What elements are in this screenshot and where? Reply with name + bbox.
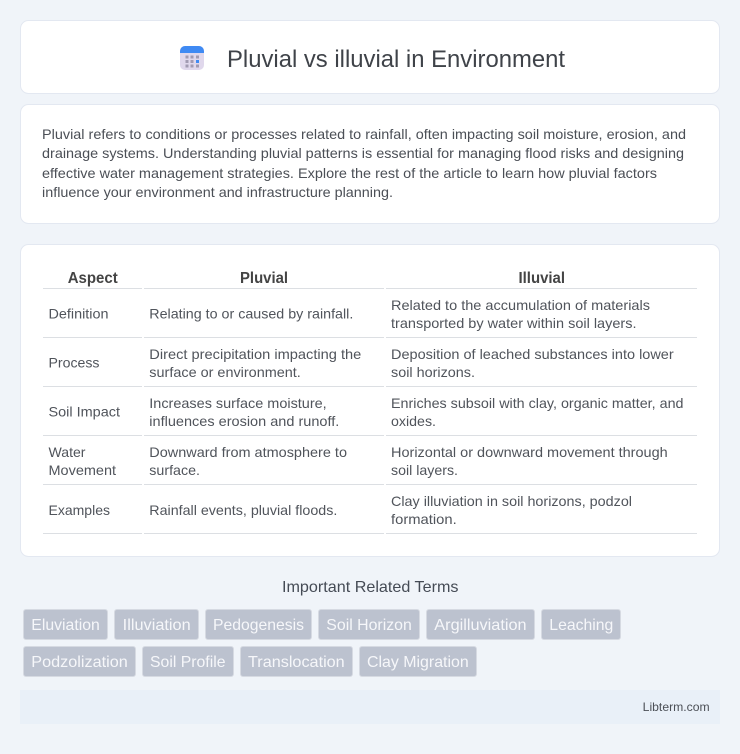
chip: Clay Migration: Clay Migration — [367, 654, 469, 671]
row: process: Direct precipitation impacting the — [149, 346, 362, 362]
row: examples: Examples — [48, 502, 110, 518]
chip: Soil Horizon: Soil Horizon — [326, 617, 412, 634]
chip: Pedogenesis — [206, 610, 312, 640]
text block: introduction: Pluvial refers to conditions or processes related to rainfall, often impacting soil moisture, erosion, and — [42, 126, 686, 142]
table header: Illuvial — [518, 270, 565, 287]
chip: Leaching — [542, 610, 620, 640]
row: water movement: Water — [48, 444, 86, 460]
chip: Podzolization — [24, 646, 136, 676]
chip: Clay Migration — [360, 646, 476, 676]
row: soil impact — [48, 395, 684, 429]
row: soil impact: Enriches subsoil with clay, organic matter, and — [391, 395, 684, 411]
text block: introduction: drainage systems. Understanding pluvial patterns is essential for managing flood risks and designing — [42, 145, 684, 161]
panel: related term chips — [24, 610, 620, 676]
panel: title card — [20, 20, 720, 94]
row: soil impact: oxides. — [391, 413, 436, 429]
title: Pluvial vs illuvial in Environment — [227, 46, 565, 73]
panel: comparison table — [20, 244, 720, 556]
chip: Soil Horizon — [318, 610, 420, 640]
chip: Soil Profile: Soil Profile — [150, 654, 226, 671]
row: definition: Relating to or caused by rainfall. — [149, 306, 353, 322]
row: examples: Clay illuviation in soil horizons, podzol — [391, 493, 632, 509]
row: soil impact: influences erosion and runoff. — [149, 413, 339, 429]
chip: Translocation — [240, 646, 352, 676]
chip: Eluviation: Eluviation — [31, 617, 100, 634]
icon: calendar — [180, 46, 204, 70]
table header: Pluvial — [240, 270, 288, 287]
row: process: Process — [48, 354, 100, 370]
chip: Eluviation — [24, 610, 108, 640]
row: definition: Definition — [48, 306, 108, 322]
chip: Illuviation: Illuviation — [123, 617, 191, 634]
table header: Aspect — [68, 270, 118, 287]
chip: Podzolization: Podzolization — [31, 654, 128, 671]
text block: introduction: influence your environment and infrastructure planning. — [42, 184, 393, 200]
chip: Illuviation — [114, 610, 198, 640]
text block: introduction: effective water management strategies. Explore the rest of the article to learn how pluvial factors — [42, 165, 657, 181]
row: water movement: soil layers. — [391, 462, 458, 478]
row: water movement: Movement — [48, 462, 116, 478]
row: process: surface or environment. — [149, 364, 301, 380]
table header — [68, 270, 565, 287]
chip: Soil Profile — [142, 646, 234, 676]
row: process: soil horizons. — [391, 364, 475, 380]
row: definition — [48, 297, 650, 331]
chip: Translocation: Translocation — [248, 654, 345, 671]
heading: important related terms: Important Related Terms — [282, 579, 458, 596]
row: water movement — [48, 444, 668, 478]
chip: Leaching: Leaching — [549, 617, 613, 634]
text block: introduction — [42, 126, 686, 200]
row: process — [48, 346, 674, 380]
row: examples — [48, 493, 632, 527]
panel: introduction — [20, 104, 720, 224]
row: water movement: Horizontal or downward movement through — [391, 444, 668, 460]
footer credit: Libterm.com — [643, 700, 710, 714]
row: examples: Rainfall events, pluvial floods. — [149, 502, 337, 518]
row: process: Deposition of leached substances into lower — [391, 346, 674, 362]
row: examples: formation. — [391, 511, 457, 527]
row: definition: transported by water within soil layers. — [391, 315, 636, 331]
table rules — [43, 288, 697, 534]
chip: Argilluviation — [426, 610, 534, 640]
row: soil impact: Soil Impact — [48, 404, 120, 420]
row: soil impact: Increases surface moisture, — [149, 395, 327, 411]
chip: Argilluviation: Argilluviation — [434, 617, 527, 634]
row: definition: Related to the accumulation of materials — [391, 297, 650, 313]
row: water movement: surface. — [149, 462, 200, 478]
row: water movement: Downward from atmosphere to — [149, 444, 347, 460]
footer bar — [20, 690, 720, 724]
chip: Pedogenesis: Pedogenesis — [213, 617, 304, 634]
